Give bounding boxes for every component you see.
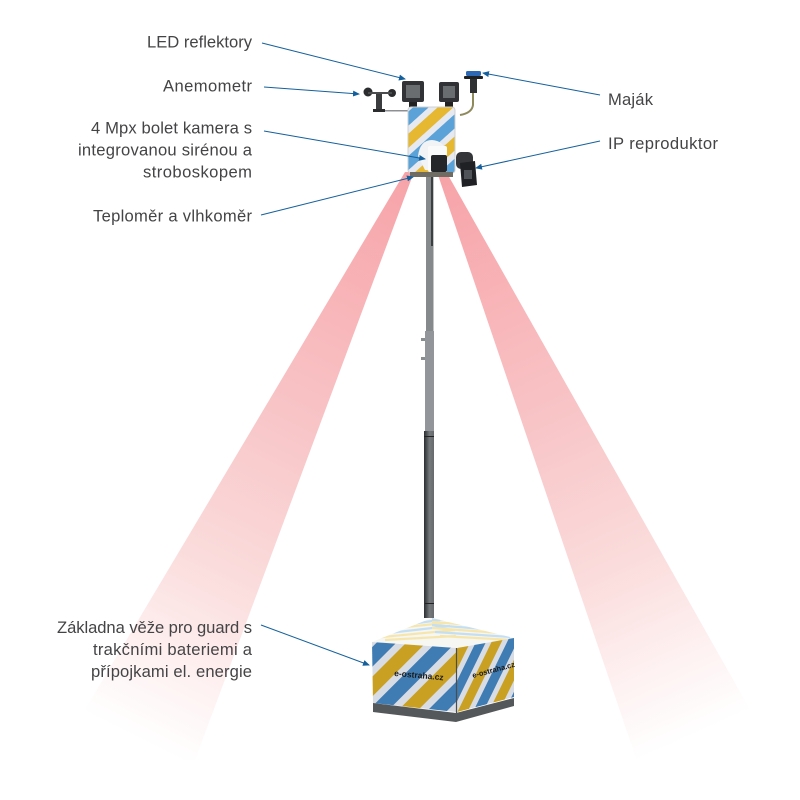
icon: LED floodlight right — [439, 82, 459, 107]
label: Teploměr a vlhkoměr: Teploměr a vlhkoměr — [93, 206, 252, 226]
label: kamera: stroboskopem — [143, 162, 252, 182]
base corner edge — [456, 648, 458, 713]
label: Základna: trakčními bateriemi a — [93, 640, 253, 659]
arrow: kamera — [264, 131, 425, 159]
panel: tower base — [372, 618, 516, 722]
icon: beacon — [460, 71, 483, 115]
label: Maják: Maják — [608, 90, 654, 109]
base plinth — [373, 698, 514, 722]
label: Anemometr: Anemometr — [163, 76, 252, 96]
label: Základna: Základna věže pro guard s — [57, 618, 252, 637]
left brand label: e-ostraha.cz — [394, 668, 444, 682]
icon: LED floodlight left — [402, 81, 424, 107]
panel: control box — [408, 107, 455, 177]
base roof — [372, 618, 514, 648]
arrow: Anemometr — [264, 87, 359, 94]
label: kamera: integrovanou sirénou a — [78, 140, 253, 160]
base right face — [457, 638, 514, 712]
label: kamera — [78, 118, 253, 182]
label: Základna — [57, 618, 253, 681]
left light beam — [55, 172, 414, 760]
label: LED reflektory: LED reflektory — [147, 32, 253, 52]
icon: bullet camera — [418, 140, 447, 172]
tower head — [364, 71, 483, 187]
base left face — [372, 642, 456, 712]
arrow: Základna — [261, 625, 369, 665]
icon: anemometer — [364, 88, 408, 112]
right brand label: e-ostraha.cz — [471, 660, 516, 680]
label: Základna: přípojkami el. energie — [91, 662, 252, 681]
label: kamera: 4 Mpx bolet kamera s — [91, 118, 252, 138]
right light beam — [438, 175, 770, 770]
arrow: LED reflektory — [262, 43, 405, 79]
arrow: Teploměr — [261, 177, 413, 215]
arrow: IP reproduktor — [476, 141, 600, 168]
icon: IP speaker — [456, 152, 477, 187]
pole — [421, 176, 434, 618]
label: IP reproduktor: IP reproduktor — [608, 134, 718, 153]
arrow: Maják — [483, 73, 600, 95]
